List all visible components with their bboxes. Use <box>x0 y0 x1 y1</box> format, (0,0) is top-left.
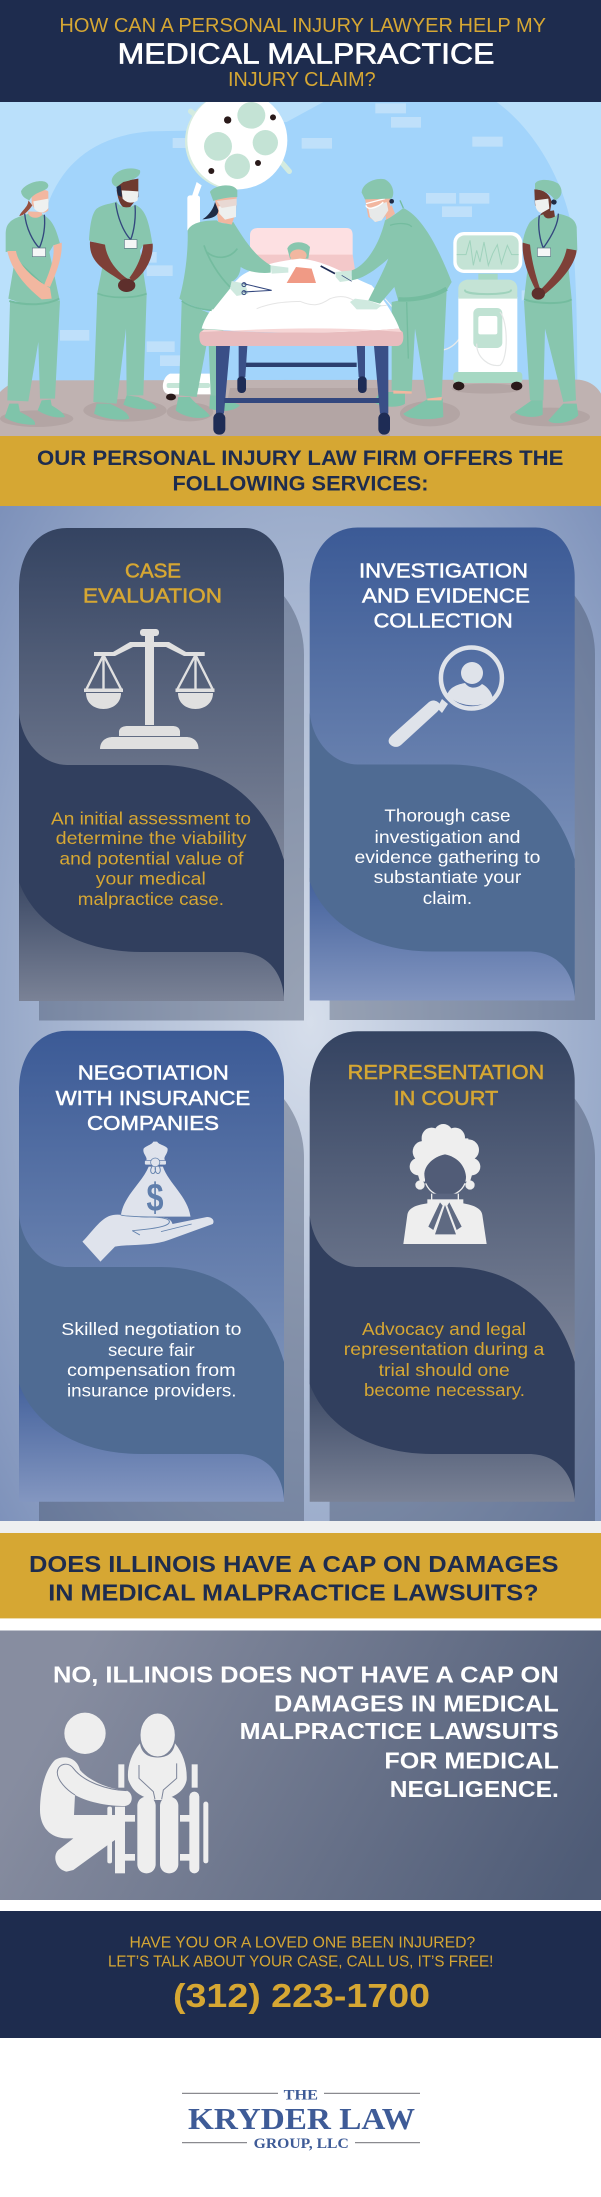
card body text <box>354 806 540 908</box>
panel: services background <box>0 506 601 1521</box>
answer text: NO, ILLINOIS DOES NOT HAVE A CAP ON <box>53 1661 559 1687</box>
card heading: COMPANIES <box>87 1113 219 1135</box>
answer text: DAMAGES IN MEDICAL <box>274 1690 559 1716</box>
card body text: claim. <box>423 888 472 908</box>
card body text: malpractice case. <box>78 889 224 909</box>
card wave <box>310 1215 575 1499</box>
logo: The Kryder Law Group: THE <box>284 2087 318 2103</box>
card heading: EVALUATION <box>83 586 222 608</box>
card heading: IN COURT <box>394 1088 498 1110</box>
card wave <box>310 712 575 996</box>
card: representation in court <box>310 1031 595 1521</box>
card heading: REPRESENTATION <box>348 1062 544 1084</box>
card body text: An initial assessment to <box>51 808 251 828</box>
card body text: secure fair <box>108 1340 195 1360</box>
bed <box>199 228 403 435</box>
logo: The Kryder Law Group: KRYDER LAW <box>188 2101 415 2136</box>
figure: nurse second <box>89 168 157 420</box>
panel: call to action <box>0 1911 601 2038</box>
card body text: evidence gathering to <box>354 847 540 867</box>
card body text: representation during a <box>344 1339 545 1359</box>
card body shape <box>310 528 575 1000</box>
card body text: trial should one <box>379 1360 510 1380</box>
figure: nurse right <box>515 180 578 423</box>
card body text <box>344 1319 545 1400</box>
banner: Illinois cap question <box>0 1533 601 1618</box>
header line one: HOW CAN A PERSONAL INJURY LAWYER HELP MY <box>59 15 546 37</box>
card heading <box>359 561 530 633</box>
panel: call to action: HAVE YOU OR A LOVED ONE BEEN INJURED? <box>130 1934 476 1952</box>
card: case evaluation <box>19 528 304 1020</box>
card body shape <box>19 528 284 1001</box>
card heading <box>56 1063 250 1135</box>
card body text: investigation and <box>374 827 520 847</box>
figure: nurse left <box>5 181 65 425</box>
panel: call to action: LET’S TALK ABOUT YOUR CASE, CALL US, IT’S FREE! <box>108 1954 493 1970</box>
answer text: FOR MEDICAL <box>384 1747 559 1773</box>
card body text: insurance providers. <box>67 1381 236 1401</box>
card wave <box>19 1215 284 1499</box>
icon: magnifying glass with person <box>389 648 502 747</box>
card shadow <box>39 1063 304 1521</box>
panel: answer <box>0 1630 601 1900</box>
banner: services heading <box>0 436 601 506</box>
card body text: substantiate your <box>374 867 521 887</box>
card heading: INVESTIGATION <box>359 561 528 583</box>
card heading: CASE <box>125 561 181 583</box>
card: negotiation with insurance companies <box>19 1031 304 1521</box>
card heading: NEGOTIATION <box>78 1063 229 1085</box>
card body text: determine the viability <box>56 828 247 848</box>
card heading <box>348 1062 544 1110</box>
figure: surgeon left <box>179 185 288 310</box>
card heading: COLLECTION <box>374 611 513 633</box>
banner: Illinois cap question: IN MEDICAL MALPRACTICE LAWSUITS? <box>48 1579 539 1605</box>
card body text <box>61 1319 241 1401</box>
header line three: INJURY CLAIM? <box>228 69 376 91</box>
card heading <box>83 561 222 608</box>
card wave <box>19 713 284 997</box>
icon: scales of justice <box>84 629 214 749</box>
banner: Illinois cap question: DOES ILLINOIS HAVE A CAP ON DAMAGES <box>29 1551 558 1577</box>
banner: services heading: OUR PERSONAL INJURY LAW FIRM OFFERS THE <box>37 447 563 470</box>
card shadow <box>39 560 304 1020</box>
icon: caregiver and wheelchair patient <box>40 1713 208 1873</box>
card body text: your medical <box>96 869 206 889</box>
answer text: MALPRACTICE LAWSUITS <box>240 1718 559 1744</box>
card shadow <box>330 1063 595 1521</box>
icon: heart monitor <box>440 232 522 390</box>
figure: surgeon left legs <box>176 302 240 418</box>
card heading: AND EVIDENCE <box>362 586 530 608</box>
logo: The Kryder Law Group <box>182 2087 420 2152</box>
answer text <box>53 1661 559 1802</box>
icon: money bag in hand <box>82 1142 214 1262</box>
card body text: and potential value of <box>59 848 244 868</box>
card body text <box>51 808 251 909</box>
card body text: become necessary. <box>364 1380 525 1400</box>
logo: The Kryder Law Group: GROUP, LLC <box>254 2136 349 2152</box>
dollar sign: $ <box>146 1176 164 1220</box>
phone number: (312) 223-1700 <box>173 1977 430 2014</box>
icon: judge with wig <box>403 1124 487 1244</box>
card body text: compensation from <box>67 1360 236 1380</box>
divider strip <box>0 1521 601 1533</box>
figure: surgeon right <box>321 179 452 359</box>
card body shape <box>310 1031 575 1502</box>
card body text: Skilled negotiation to <box>61 1319 241 1339</box>
card body text: Thorough case <box>384 806 510 826</box>
answer text: NEGLIGENCE. <box>390 1776 559 1802</box>
card body shape <box>19 1031 284 1502</box>
card body text: Advocacy and legal <box>362 1319 526 1339</box>
header panel <box>0 0 601 102</box>
figure: surgeon right legs <box>373 290 447 419</box>
card: investigation and evidence collection <box>310 528 595 1020</box>
icon: surgical lamp <box>163 91 289 400</box>
card heading: WITH INSURANCE <box>56 1088 250 1110</box>
illustration: operating room <box>0 91 601 436</box>
banner: services heading: FOLLOWING SERVICES: <box>172 473 428 496</box>
main title: MEDICAL MALPRACTICE <box>118 38 494 70</box>
card shadow <box>330 560 595 1020</box>
